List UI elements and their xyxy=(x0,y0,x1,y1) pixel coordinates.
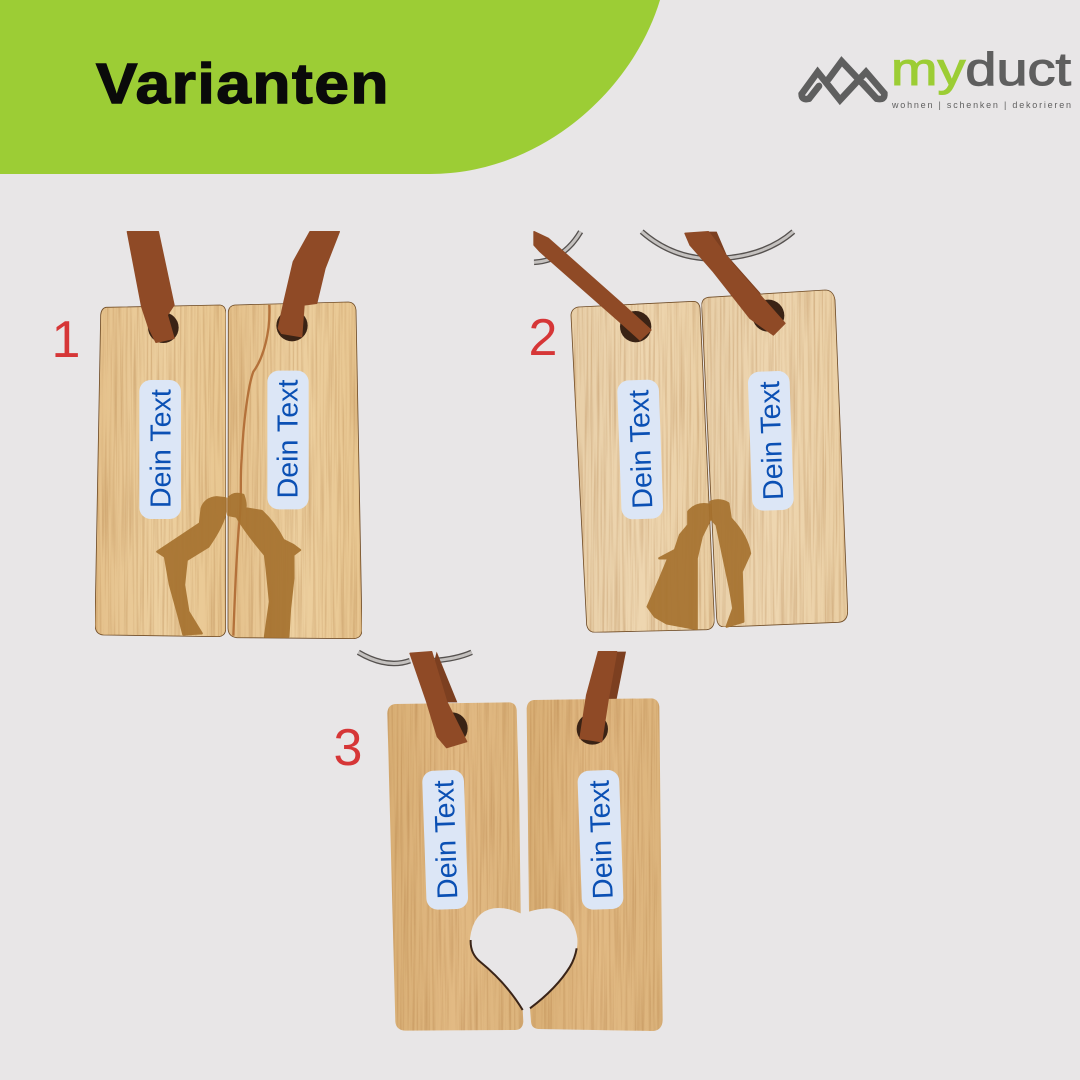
left text label: Dein Text xyxy=(623,389,659,509)
right strap xyxy=(685,232,785,335)
variant 3: heart keychain xyxy=(358,652,663,1031)
logo: myduct xyxy=(802,43,1071,110)
right text label xyxy=(267,371,309,509)
number 1: 1 xyxy=(52,311,80,369)
key ring xyxy=(358,652,472,663)
right hole xyxy=(276,310,308,341)
right hole xyxy=(577,713,608,745)
right hole xyxy=(752,300,784,332)
left tag xyxy=(95,305,226,637)
groom silhouette xyxy=(711,500,750,627)
logo wordmark: my duct xyxy=(891,43,1071,95)
right text label xyxy=(748,371,794,511)
left strap xyxy=(534,232,651,340)
left text label xyxy=(617,379,663,520)
logo tagline: wohnen | schenken | dekorieren xyxy=(891,100,1071,110)
left tag xyxy=(571,301,714,632)
title: Varianten xyxy=(96,52,390,116)
right strap xyxy=(278,232,339,337)
left strap xyxy=(127,232,174,342)
right text label: Dein Text xyxy=(272,379,304,498)
right tag xyxy=(527,698,663,1031)
right silhouette xyxy=(228,494,300,637)
left text label xyxy=(139,380,181,519)
logo icon: mountains xyxy=(802,61,884,100)
left hole xyxy=(436,712,468,744)
left hole xyxy=(148,312,179,343)
variant 2: bride and groom keychain xyxy=(534,232,848,632)
green header shape xyxy=(0,0,660,174)
left silhouette xyxy=(157,497,226,634)
key rings xyxy=(534,232,793,262)
bride silhouette xyxy=(648,504,711,629)
wood vein xyxy=(233,305,269,636)
variant 1: kissing couple keychain xyxy=(95,232,362,639)
right text label: Dein Text xyxy=(584,780,620,900)
right tag xyxy=(702,290,848,627)
back strap xyxy=(707,232,761,300)
left text label xyxy=(422,770,468,910)
right strap xyxy=(580,652,617,742)
left hole xyxy=(620,311,651,342)
heart cut edges xyxy=(471,940,577,1010)
right text label xyxy=(577,770,624,910)
right tag xyxy=(228,302,362,639)
number 3: 3 xyxy=(334,719,362,777)
left text label: Dein Text xyxy=(428,780,464,900)
left strap xyxy=(410,652,467,748)
back straps xyxy=(433,652,626,702)
right text label: Dein Text xyxy=(754,381,790,501)
number 2: 2 xyxy=(529,309,557,367)
left text label: Dein Text xyxy=(146,389,178,508)
left tag xyxy=(387,702,523,1031)
